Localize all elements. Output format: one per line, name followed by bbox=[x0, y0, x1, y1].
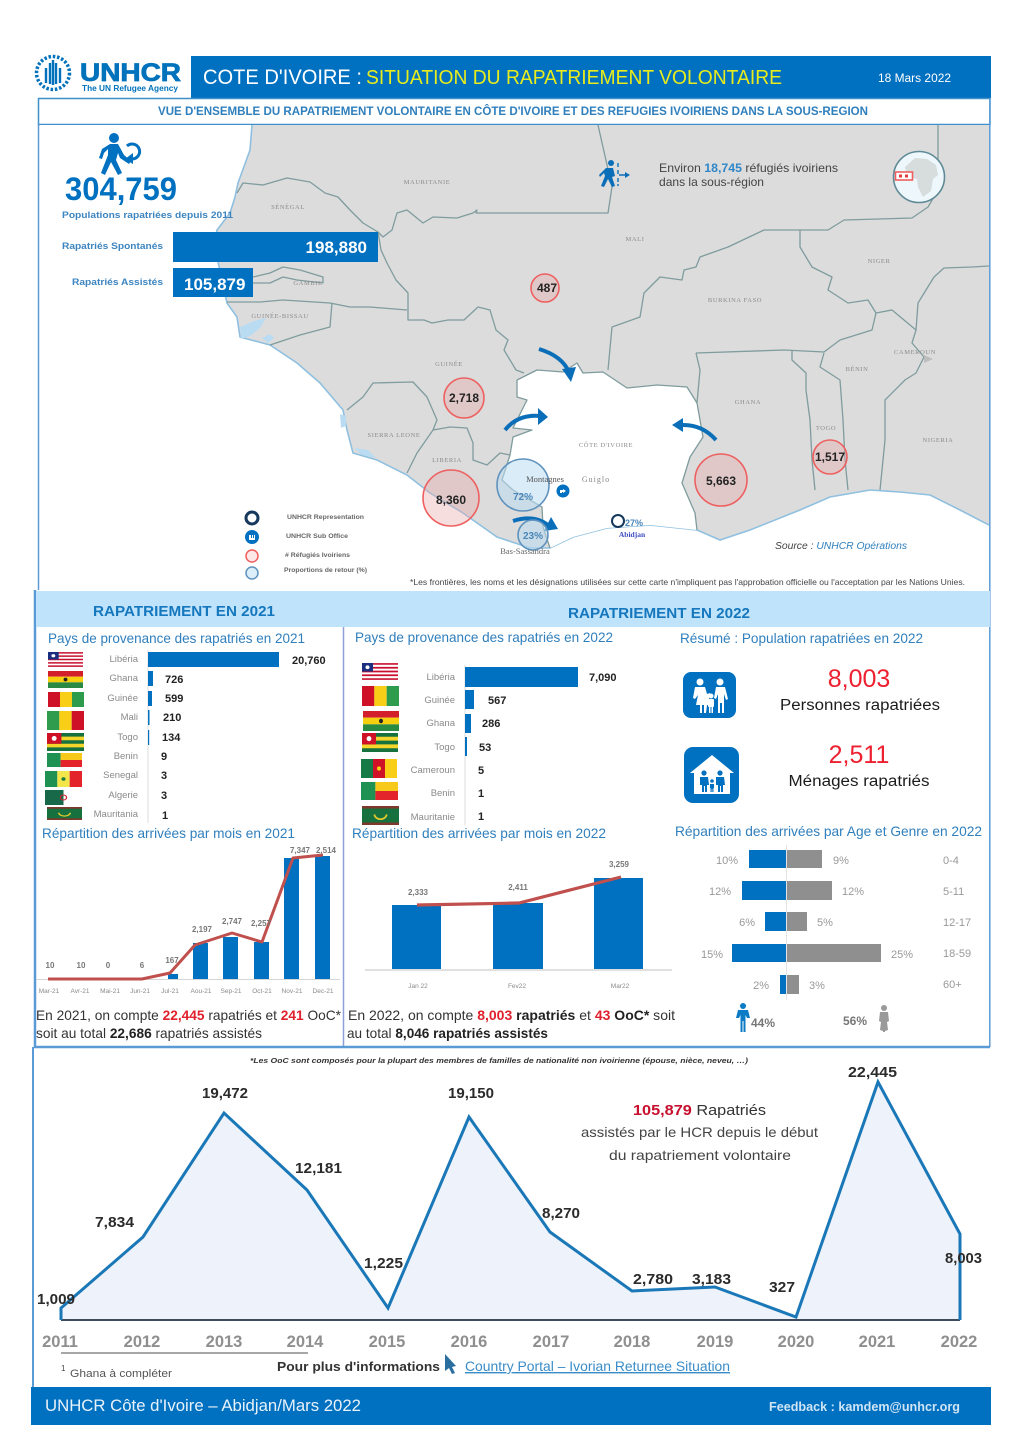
chart: age and gender pyramid: 25% bbox=[891, 949, 913, 961]
chart: age and gender pyramid: 60+ bbox=[943, 979, 962, 991]
refugee circles by country: 1,517 bbox=[815, 450, 845, 464]
footnote: OoC definition: *Les OoC sont composés pour la plupart des membres de familles de nationalité non ivoirienne (épouse, nièce, neveu, …) bbox=[250, 1056, 749, 1065]
headline total bbox=[62, 133, 234, 221]
summary heading: Résumé : Population rapatriées en 2022 bbox=[680, 630, 923, 646]
map panel: LIBERIA bbox=[432, 457, 462, 464]
assisted returnees bar: Rapatriés Assistés bbox=[72, 277, 163, 288]
footer bar: UNHCR Côte d'Ivoire – Abidjan/Mars 2022 bbox=[45, 1397, 361, 1415]
footnote: Ghana bbox=[61, 1353, 308, 1380]
stat: households returned bbox=[788, 741, 930, 790]
chart: arrivals by month 2021: 2,514 bbox=[316, 846, 337, 855]
map legend: UNHCR Sub Office bbox=[286, 534, 349, 540]
footnote: Ghana: 1 bbox=[61, 1364, 66, 1373]
chart: provenance 2021 bbox=[45, 630, 326, 823]
headline total: Populations rapatriées depuis 2011 bbox=[62, 210, 234, 221]
chart: provenance 2022: Benin bbox=[431, 788, 455, 799]
header banner: COTE D'IVOIRE : bbox=[203, 66, 362, 89]
map legend: Proportions de retour (%) bbox=[284, 568, 367, 574]
office markers and place names: Abidjan bbox=[619, 530, 646, 539]
refugee circles by country bbox=[423, 274, 847, 526]
map panel: GAMBIE bbox=[293, 280, 323, 287]
map panel: SIERRA LEONE bbox=[368, 432, 420, 439]
map legend bbox=[245, 512, 367, 579]
refugee circles by country: 2,718 bbox=[449, 391, 479, 405]
chart: provenance 2021: Algerie bbox=[108, 790, 138, 801]
chart: provenance 2022: 567 bbox=[488, 695, 506, 707]
chart: arrivals by month 2021: 6 bbox=[140, 961, 145, 970]
chart: provenance 2022: 5 bbox=[478, 765, 484, 777]
chart: provenance 2021: 1 bbox=[162, 810, 168, 822]
chart: arrivals by month 2022: Jan 22 bbox=[408, 983, 428, 990]
chart: arrivals by month 2021: Oct-21 bbox=[252, 988, 272, 995]
stat: persons returned bbox=[780, 665, 940, 714]
return proportion circles: 72% bbox=[513, 492, 533, 503]
chart: assisted returnees per year bbox=[37, 1064, 982, 1351]
chart: provenance 2022 bbox=[355, 629, 617, 825]
chart: age and gender pyramid: Répartition des arrivées par Age et Genre en 2022 bbox=[675, 823, 982, 839]
chart: provenance 2021: Senegal bbox=[103, 770, 138, 781]
chart: assisted returnees per year: 8,270 bbox=[542, 1205, 580, 1222]
map panel: NIGERIA bbox=[923, 437, 953, 444]
icon and share: male bbox=[736, 1003, 775, 1032]
chart: age and gender pyramid: 12% bbox=[842, 886, 864, 898]
refugee circles by country: 8,360 bbox=[436, 493, 466, 507]
icon and share: female: 56% bbox=[843, 1014, 867, 1028]
map panel: SÉNÉGAL bbox=[271, 203, 305, 211]
chart: arrivals by month 2021: 7,347 bbox=[290, 846, 311, 855]
chart: assisted returnees per year: 12,181 bbox=[295, 1160, 342, 1177]
chart: arrivals by month 2022: 2,333 bbox=[408, 888, 429, 897]
office markers and place names bbox=[500, 474, 646, 556]
map panel: CAMEROUN bbox=[894, 349, 936, 356]
headline total: 304,759 bbox=[65, 171, 177, 207]
chart: provenance 2021: Libéria bbox=[109, 654, 139, 665]
subtitle bar: VUE D'ENSEMBLE DU RAPATRIEMENT VOLONTAIRE EN CÔTE D'IVOIRE ET DES REFUGIES IVOIRIENS DANS LA SOUS-REGION bbox=[158, 105, 868, 118]
assisted returnees bar: 105,879 bbox=[184, 275, 245, 294]
map panel: TOGO bbox=[816, 425, 836, 432]
chart: provenance 2021: 726 bbox=[165, 674, 183, 686]
chart: assisted returnees per year: 2014 bbox=[287, 1333, 324, 1351]
chart: assisted returnees per year: 7,834 bbox=[95, 1214, 135, 1231]
chart: arrivals by month 2021: 2,197 bbox=[192, 925, 213, 934]
chart: provenance 2021: 3 bbox=[161, 790, 167, 802]
chart: assisted returnees per year: 2018 bbox=[614, 1333, 650, 1351]
text: 2021 summary: En 2021, on compte 22,445 rapatriés et 241 OoC* bbox=[36, 1007, 342, 1023]
map panel: BÉNIN bbox=[846, 365, 868, 373]
chart: assisted returnees per year: 2020 bbox=[778, 1333, 814, 1351]
stat: persons returned: Personnes rapatriées bbox=[780, 697, 940, 714]
chart: assisted returnees per year: 22,445 bbox=[848, 1064, 897, 1081]
chart: age and gender pyramid: 6% bbox=[739, 917, 755, 929]
chart: provenance 2021: Ghana bbox=[109, 673, 139, 684]
chart: assisted returnees per year: 19,150 bbox=[448, 1085, 494, 1102]
chart: provenance 2021: Guinée bbox=[107, 693, 138, 704]
office markers and place names: Bas-Sassandra bbox=[500, 546, 550, 556]
chart: assisted returnees per year: 1,009 bbox=[37, 1291, 75, 1308]
regional refugees note bbox=[599, 160, 838, 189]
map source: Source : UNHCR Opérations bbox=[775, 541, 907, 552]
chart: provenance 2021: 3 bbox=[161, 770, 167, 782]
chart: assisted returnees per year: 327 bbox=[769, 1279, 795, 1296]
chart: arrivals by month 2022 bbox=[352, 825, 672, 990]
icon and share: male: 44% bbox=[751, 1016, 775, 1030]
chart: provenance 2021: 20,760 bbox=[292, 655, 326, 667]
chart: assisted returnees per year: 2016 bbox=[451, 1333, 487, 1351]
chart: assisted returnees per year: 2021 bbox=[859, 1333, 895, 1351]
map panel: GHANA bbox=[735, 399, 761, 406]
chart: arrivals by month 2022: Répartition des arrivées par mois en 2022 bbox=[352, 825, 606, 841]
stat: households returned: Ménages rapatriés bbox=[788, 773, 930, 790]
chart: provenance 2021: Benin bbox=[114, 751, 138, 762]
text: 2022 summary: au total 8,046 rapatriés assistés bbox=[347, 1025, 548, 1041]
chart: assisted returnees per year: 19,472 bbox=[202, 1085, 248, 1102]
refugee circles by country: 487 bbox=[537, 281, 557, 295]
chart: provenance 2022: Cameroun bbox=[411, 765, 455, 776]
chart: arrivals by month 2021: Aou-21 bbox=[191, 988, 212, 995]
chart: age and gender pyramid: 12-17 bbox=[943, 917, 971, 929]
map arrows bbox=[505, 349, 716, 531]
chart: provenance 2022: Ghana bbox=[426, 718, 456, 729]
inset locator map bbox=[894, 152, 944, 202]
header banner: SITUATION DU RAPATRIEMENT VOLONTAIRE bbox=[366, 67, 782, 89]
chart: age and gender pyramid: 0-4 bbox=[943, 855, 959, 867]
chart: provenance 2022: 286 bbox=[482, 718, 500, 730]
chart: assisted returnees per year: 2022 bbox=[941, 1333, 977, 1351]
chart: provenance 2022: Mauritanie bbox=[411, 812, 455, 823]
chart: arrivals by month 2022: Mar22 bbox=[611, 983, 630, 990]
chart: arrivals by month 2021: 167 bbox=[165, 956, 179, 965]
map legend: # Réfugiés Ivoiriens bbox=[285, 553, 351, 559]
map panel bbox=[40, 125, 989, 590]
text: 2021 summary: soit au total 22,686 rapatriés assistés bbox=[36, 1025, 262, 1041]
chart: arrivals by month 2021: Jul-21 bbox=[161, 988, 179, 995]
chart: arrivals by month 2022: 2,411 bbox=[508, 883, 528, 892]
text: 2022 summary bbox=[347, 1007, 675, 1041]
stat: persons returned: 8,003 bbox=[828, 665, 890, 693]
chart: arrivals by month 2022: 3,259 bbox=[609, 860, 630, 869]
logo: UNHCR: The UN Refugee Agency bbox=[82, 84, 179, 93]
chart: provenance 2021: 9 bbox=[161, 751, 167, 763]
text: total assisted callout bbox=[581, 1102, 818, 1163]
icon: family bbox=[683, 672, 736, 718]
stat: households returned: 2,511 bbox=[829, 741, 889, 769]
map legend: UNHCR Representation bbox=[287, 515, 364, 521]
chart: provenance 2022: Guinée bbox=[424, 695, 455, 706]
chart: assisted returnees per year: 1,225 bbox=[364, 1255, 403, 1272]
chart: arrivals by month 2021: Mai-21 bbox=[100, 988, 120, 995]
chart: arrivals by month 2021: Jun-21 bbox=[130, 988, 150, 995]
chart: age and gender pyramid bbox=[675, 823, 982, 1000]
footer bar: Feedback : kamdem@unhcr.org bbox=[769, 1400, 960, 1414]
icon and share: female bbox=[843, 1005, 889, 1032]
logo: UNHCR bbox=[36, 56, 181, 93]
chart: provenance 2021: Mauritania bbox=[94, 809, 139, 820]
chart: age and gender pyramid: 18-59 bbox=[943, 948, 971, 960]
chart: arrivals by month 2021 bbox=[36, 825, 340, 995]
chart: provenance 2022: 1 bbox=[478, 788, 484, 800]
section band: rapatriement en 2021: RAPATRIEMENT EN 2021 bbox=[93, 603, 275, 620]
text: total assisted callout: 105,879 Rapatriés bbox=[633, 1102, 766, 1119]
map panel: MALI bbox=[625, 236, 645, 243]
return proportion circles bbox=[497, 459, 643, 550]
map disclaimer: *Les frontières, les noms et les désignations utilisées sur cette carte n'impliquent pas l'approbation officielle ou l'acceptation par les Nations Unies. bbox=[410, 577, 965, 587]
header banner bbox=[191, 56, 991, 98]
section band: rapatriement en 2021 bbox=[36, 591, 990, 627]
chart: provenance 2021: Pays de provenance des rapatriés en 2021 bbox=[48, 630, 305, 646]
chart: assisted returnees per year: 2017 bbox=[533, 1333, 569, 1351]
map panel: MAURITANIE bbox=[404, 179, 450, 186]
chart: provenance 2022: Pays de provenance des rapatriés en 2022 bbox=[355, 629, 613, 645]
chart: age and gender pyramid: 5-11 bbox=[943, 886, 964, 898]
chart: arrivals by month 2021: 2,257 bbox=[251, 919, 272, 928]
chart: age and gender pyramid: 2% bbox=[753, 980, 769, 992]
chart: assisted returnees per year: 2013 bbox=[206, 1333, 242, 1351]
icon: household bbox=[684, 747, 739, 803]
chart: assisted returnees per year: 2012 bbox=[124, 1333, 160, 1351]
chart: arrivals by month 2021: Répartition des arrivées par mois en 2021 bbox=[42, 825, 295, 841]
chart: arrivals by month 2021: 10 bbox=[46, 961, 55, 970]
chart: provenance 2021: 599 bbox=[165, 693, 183, 705]
office markers and place names: Montagnes bbox=[526, 474, 564, 484]
footnote: Ghana: Ghana à compléter bbox=[70, 1368, 172, 1380]
chart: provenance 2021: 210 bbox=[163, 712, 181, 724]
section heading: rapatriement en 2022: RAPATRIEMENT EN 2022 bbox=[568, 605, 750, 622]
chart: assisted returnees per year: 2015 bbox=[369, 1333, 405, 1351]
chart: arrivals by month 2021: Mar-21 bbox=[39, 988, 60, 995]
more information link bbox=[277, 1354, 730, 1374]
chart: provenance 2022: 53 bbox=[479, 742, 491, 754]
spontaneous returnees bar: 198,880 bbox=[306, 238, 367, 257]
logo: UNHCR: UNHCR bbox=[80, 59, 181, 87]
chart: age and gender pyramid: 10% bbox=[716, 855, 738, 867]
map panel: GUINÉE bbox=[435, 360, 463, 368]
spontaneous returnees bar bbox=[62, 232, 378, 262]
chart: provenance 2021: Mali bbox=[121, 712, 138, 723]
chart: assisted returnees per year: 2,780 bbox=[633, 1271, 673, 1288]
chart: assisted returnees per year: 8,003 bbox=[945, 1250, 982, 1267]
chart: provenance 2021: 134 bbox=[162, 732, 181, 744]
office markers and place names: Guiglo bbox=[582, 475, 610, 484]
return proportion circles: 27% bbox=[625, 518, 643, 528]
chart: provenance 2022: Libéria bbox=[426, 672, 456, 683]
map panel: NIGER bbox=[868, 258, 890, 265]
subtitle bar bbox=[38, 98, 990, 124]
assisted returnees bar bbox=[72, 268, 253, 297]
header banner: 18 Mars 2022 bbox=[878, 73, 951, 85]
footer bar bbox=[31, 1387, 991, 1425]
chart: arrivals by month 2021: 2,747 bbox=[222, 917, 243, 926]
spontaneous returnees bar: Rapatriés Spontanés bbox=[62, 241, 163, 252]
refugee circles by country: 5,663 bbox=[706, 474, 736, 488]
chart: arrivals by month 2021: Sep-21 bbox=[221, 988, 242, 995]
chart: arrivals by month 2021: 0 bbox=[106, 961, 111, 970]
return proportion circles: 23% bbox=[523, 531, 543, 542]
map panel: CÔTE D'IVOIRE bbox=[579, 441, 633, 449]
more information link: Country Portal – Ivorian Returnee Situation bbox=[465, 1358, 730, 1374]
chart: age and gender pyramid: 15% bbox=[701, 949, 723, 961]
chart: arrivals by month 2022: Fev22 bbox=[508, 983, 526, 990]
chart: age and gender pyramid: 5% bbox=[817, 917, 833, 929]
map panel: GUINÉE-BISSAU bbox=[251, 312, 309, 320]
chart: assisted returnees per year: 2011 bbox=[42, 1333, 78, 1351]
chart: arrivals by month 2021: Nov-21 bbox=[282, 988, 303, 995]
chart: age and gender pyramid: 12% bbox=[709, 886, 731, 898]
regional refugees note: dans la sous-région bbox=[659, 175, 764, 189]
text: total assisted callout: du rapatriement volontaire bbox=[609, 1147, 791, 1163]
chart: assisted returnees per year: 2019 bbox=[697, 1333, 733, 1351]
text: total assisted callout: assistés par le HCR depuis le début bbox=[581, 1124, 818, 1140]
chart: arrivals by month 2021: Dec-21 bbox=[313, 988, 334, 995]
chart: age and gender pyramid: 9% bbox=[833, 855, 849, 867]
chart: age and gender pyramid: 3% bbox=[809, 980, 825, 992]
chart: provenance 2022: 7,090 bbox=[589, 672, 617, 684]
chart: arrivals by month 2021: Avr-21 bbox=[70, 988, 90, 995]
map panel: BURKINA FASO bbox=[708, 297, 762, 304]
chart: assisted returnees per year: 3,183 bbox=[692, 1271, 731, 1288]
text: 2021 summary bbox=[36, 1007, 342, 1041]
chart: provenance 2022: 1 bbox=[478, 811, 484, 823]
more information link: Pour plus d'informations bbox=[277, 1359, 440, 1374]
chart: provenance 2021: Togo bbox=[117, 732, 138, 743]
regional refugees note: Environ 18,745 réfugiés ivoiriens bbox=[659, 161, 838, 175]
chart: provenance 2022: Togo bbox=[434, 742, 455, 753]
text: 2022 summary: En 2022, on compte 8,003 rapatriés et 43 OoC* soit bbox=[348, 1007, 675, 1023]
chart: arrivals by month 2021: 10 bbox=[77, 961, 86, 970]
